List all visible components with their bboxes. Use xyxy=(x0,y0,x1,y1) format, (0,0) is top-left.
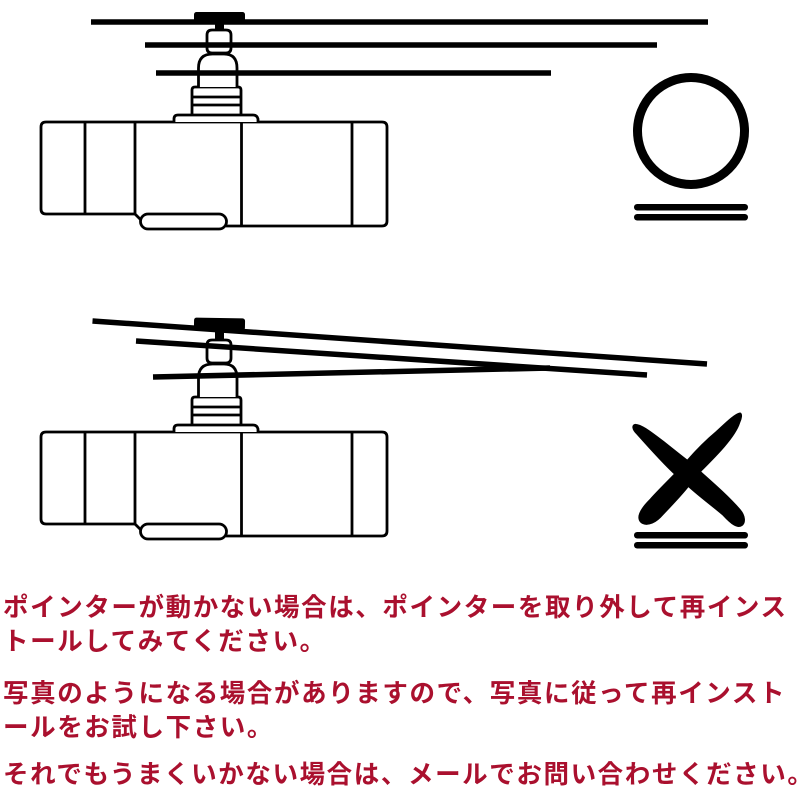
movement correct xyxy=(41,21,387,229)
hand middle xyxy=(145,42,657,48)
panel: correct installation xyxy=(41,12,748,229)
hand short tilted xyxy=(153,368,550,377)
hand long xyxy=(91,19,708,25)
text: line 4: ールをお試し下さい。 xyxy=(3,714,274,742)
knob xyxy=(194,318,245,330)
knob xyxy=(194,12,245,23)
panel: incorrect installation xyxy=(41,318,748,548)
double underline xyxy=(634,532,748,548)
icon: cross xyxy=(633,413,744,526)
hand short xyxy=(156,70,551,76)
double underline xyxy=(634,204,748,220)
icon: circle xyxy=(638,78,744,184)
text: line 3: 写真のようになる場合がありますので、写真に従って再インスト xyxy=(3,680,786,708)
movement incorrect xyxy=(41,331,387,539)
hand middle tilted xyxy=(136,341,647,375)
text: line 5: それでもうまくいかない場合は、メールでお問い合わせください。 xyxy=(3,761,800,789)
text: line 1: ポインターが動かない場合は、ポインターを取り外して再インス xyxy=(3,594,788,622)
hand long tilted xyxy=(92,321,707,364)
text: line 2: トールしてみてください。 xyxy=(3,628,327,656)
